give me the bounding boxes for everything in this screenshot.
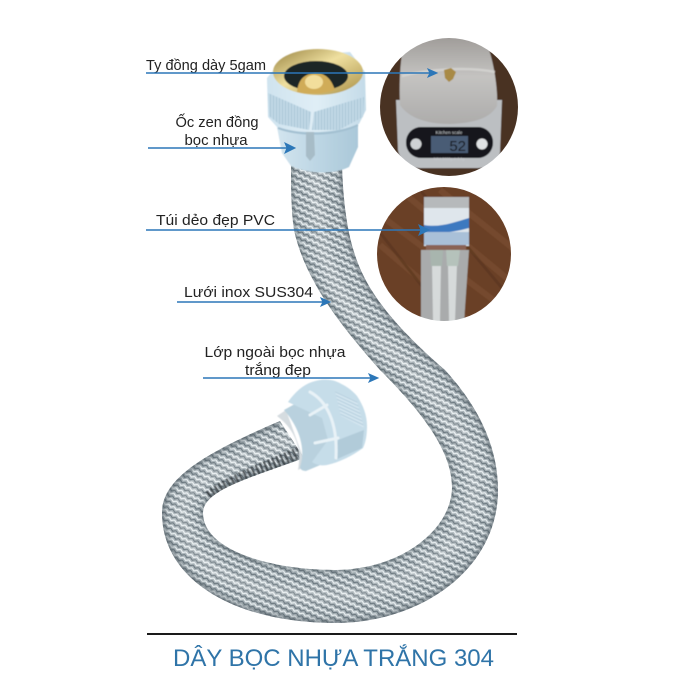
brass inner tube [297, 73, 335, 94]
collar groove [278, 125, 358, 134]
label: brass-core nut [148, 113, 295, 153]
metal ferrule [277, 410, 306, 470]
display [431, 136, 468, 153]
divider line [147, 633, 517, 635]
reading: 52 [449, 138, 466, 155]
arrow to scale [146, 69, 437, 77]
nut body [288, 380, 367, 465]
on/off button [476, 138, 488, 150]
bag top [423, 196, 470, 208]
collar [276, 118, 358, 172]
control panel [406, 127, 493, 158]
arrow to bag [146, 225, 429, 235]
twin hose ends in bag [432, 265, 457, 322]
label text: Ốc zen đồng [176, 113, 258, 131]
label text: Túi dẻo đẹp PVC [156, 212, 275, 229]
capacity note: MAX 5000g d=0.1g [434, 157, 464, 161]
lower face [335, 430, 364, 460]
arrow to nut [148, 143, 295, 153]
nut outer body [267, 52, 366, 132]
braided stainless hose [150, 160, 510, 630]
arrow to hose [203, 374, 378, 382]
bag lower band [426, 245, 466, 250]
label text line 2: bọc nhựa [184, 132, 248, 149]
label: stainless mesh [177, 284, 330, 306]
label: brass insert [146, 57, 437, 77]
photo: PVC packaging bag [375, 185, 515, 325]
lower fitting: white plastic nut [277, 380, 367, 471]
upper fitting: plastic-covered brass nut [267, 49, 366, 172]
plate highlight [402, 69, 495, 76]
scale body [396, 100, 502, 168]
scale brand: Kitchen scale [436, 130, 463, 135]
silver lower bag [421, 250, 469, 323]
label text: Lớp ngoài bọc nhựa [204, 344, 346, 361]
unit button [410, 138, 422, 150]
label: white plastic cover [203, 344, 378, 382]
clip tabs [310, 392, 338, 458]
brass insert [444, 68, 456, 82]
collar [284, 400, 337, 471]
label: PVC bag [146, 212, 429, 235]
right ridged panel [312, 97, 364, 130]
left ridged panel [268, 93, 311, 130]
bag label [424, 208, 469, 246]
label text: Ty đồng dày 5gam [146, 57, 266, 74]
label text: Lưới inox SUS304 [184, 284, 313, 301]
photo: kitchen scale weighing brass insert [378, 36, 520, 180]
scale plate [400, 38, 497, 124]
title: DÂY BỌC NHỰA TRẮNG 304 [173, 644, 494, 672]
brass ring [273, 49, 363, 95]
arrow to hose [177, 298, 330, 306]
clip tab [306, 132, 315, 161]
ridged face [335, 391, 364, 428]
label text line 2: trắng đẹp [245, 362, 311, 379]
